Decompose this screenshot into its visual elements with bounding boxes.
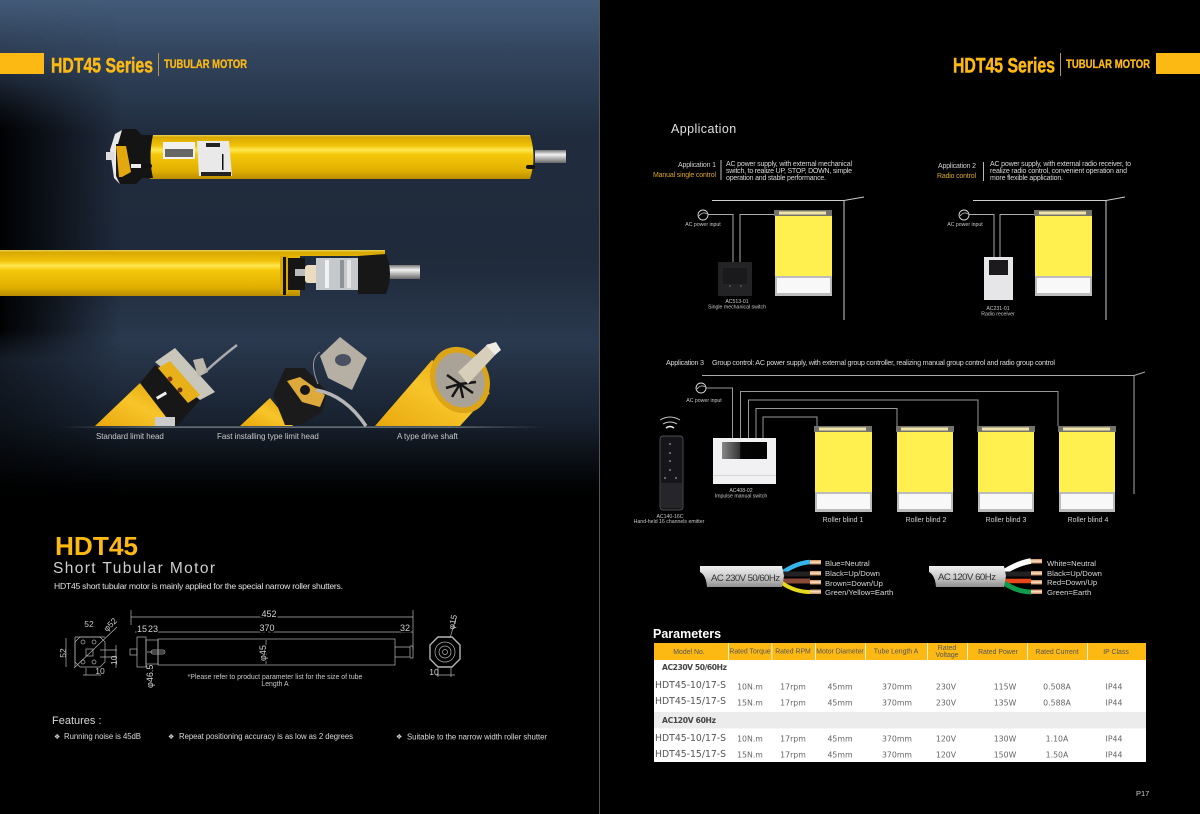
table values: 130W	[994, 734, 1017, 744]
right header	[953, 53, 1200, 78]
table values: 17rpm	[780, 682, 806, 692]
icon: group switch	[713, 438, 776, 484]
drawing: side view: φ46.5	[145, 665, 155, 688]
product title: HDT45	[55, 531, 138, 561]
application 1 text: Application 1	[678, 162, 716, 169]
table values: 17rpm	[780, 698, 806, 708]
section heading: application: Application	[671, 122, 737, 136]
table values: 115W	[994, 682, 1017, 692]
drawing: end view left	[58, 616, 119, 676]
icon: roller blind 3	[977, 426, 1035, 512]
drawing: end view left: 52	[58, 648, 68, 658]
drawing: end view left: φ52	[101, 616, 119, 633]
icon: roller blind 4	[1058, 426, 1116, 512]
cable: AC 230V: Blue=Neutral	[825, 559, 870, 568]
blind labels: Roller blind 3	[986, 517, 1027, 524]
heading: parameters: Parameters	[653, 627, 721, 641]
icon: A type drive shaft	[375, 337, 501, 426]
photo captions: A type drive shaft	[397, 432, 459, 441]
application 1 text: operation and stable performance.	[726, 175, 826, 182]
application 2 diagram: AC power input	[947, 222, 983, 228]
table header: Voltage	[936, 652, 959, 659]
application 3 diagram	[634, 372, 1145, 525]
table values: 0.508A	[1043, 682, 1071, 692]
table model names: HDT45-10/17-S	[655, 733, 726, 744]
table header: Rated Current	[1035, 649, 1079, 656]
table values: 230V	[936, 682, 957, 692]
right header: HDT45 Series	[953, 54, 1055, 78]
motor: complete tubular motor	[106, 129, 566, 184]
application 1 diagram: AC513-01	[725, 299, 749, 305]
application 2 text: more flexible application.	[990, 175, 1063, 182]
icon: standard limit head	[95, 345, 237, 426]
application 1 text	[653, 160, 852, 182]
drawing: end view right	[429, 613, 460, 677]
application 3 text: Application 3	[666, 358, 704, 367]
detail photos row	[60, 337, 545, 441]
features: ❖	[396, 734, 402, 741]
cable: AC 230V	[700, 559, 893, 597]
application 2 text: realize radio control, convenient operation and	[990, 168, 1127, 175]
table values: 135W	[994, 698, 1017, 708]
table values: 15N.m	[737, 698, 763, 708]
table header	[673, 645, 1129, 659]
dimension drawing	[58, 609, 460, 688]
table values: 45mm	[827, 750, 853, 760]
table header: Motor Diameter	[816, 648, 864, 656]
application 3 diagram: AC140-16C	[656, 514, 684, 520]
table values: 10N.m	[737, 682, 763, 692]
table values: IP44	[1106, 698, 1122, 708]
table values	[737, 682, 1122, 760]
photo captions	[96, 432, 459, 441]
blind labels: Roller blind 1	[823, 517, 864, 524]
icon: roller blind 1	[814, 426, 872, 512]
table section labels	[662, 663, 728, 725]
table values: IP44	[1106, 750, 1122, 760]
drawing note: *Please refer to product parameter list for the size of tube	[188, 674, 362, 681]
table values: 15N.m	[737, 750, 763, 760]
page number: P17	[1136, 789, 1149, 798]
application 1 text: Manual single control	[653, 172, 716, 179]
cable: AC 230V: Green/Yellow=Earth	[825, 588, 893, 597]
table values: 17rpm	[780, 750, 806, 760]
features: Running noise is 45dB	[64, 732, 141, 741]
drawing: end view right: φ15	[446, 613, 459, 630]
drawing: side view: 15	[137, 624, 147, 634]
table column dividers	[728, 643, 1088, 660]
table values: 45mm	[827, 682, 853, 692]
cable: AC 230V: Black=Up/Down	[825, 569, 880, 578]
drawing: side view: 370	[259, 623, 275, 633]
table values: 120V	[936, 734, 957, 744]
motor: cutaway view	[0, 250, 420, 296]
left header: HDT45 Series	[51, 54, 153, 78]
application 1 diagram	[685, 197, 864, 320]
table values: 45mm	[827, 698, 853, 708]
table values: 1.50A	[1046, 750, 1069, 760]
cable: AC 230V: AC 230V 50/60Hz	[711, 573, 780, 584]
cable: AC 120V: Red=Down/Up	[1047, 578, 1097, 587]
blind labels: Roller blind 4	[1068, 517, 1109, 524]
drawing: side view: 32	[400, 623, 410, 633]
table model names: HDT45-10/17-S	[655, 680, 726, 691]
icon: roller blind	[1034, 210, 1092, 296]
application 3 diagram: Impulse manual switch	[715, 494, 767, 500]
left header: TUBULAR MOTOR	[164, 57, 247, 71]
table header: Model No.	[673, 649, 705, 656]
table header: Rated	[938, 645, 956, 652]
features	[52, 715, 547, 742]
application 1 text: AC power supply, with external mechanical	[726, 161, 852, 168]
product title: HDT45 short tubular motor is mainly applied for the special narrow roller shutters.	[54, 581, 343, 591]
table header: Tube Length A	[874, 648, 919, 656]
table section labels: AC230V 50/60Hz	[662, 663, 728, 672]
table values: 1.10A	[1046, 734, 1069, 744]
drawing: end view right: 10	[429, 667, 439, 677]
table values: 370mm	[882, 698, 912, 708]
table values: 370mm	[882, 682, 912, 692]
table header: Rated Power	[978, 649, 1019, 656]
table section labels: AC120V 60Hz	[662, 716, 717, 725]
icon: roller blind	[774, 210, 832, 296]
table values: IP44	[1106, 734, 1122, 744]
application 1 diagram: Single mechanical switch	[708, 304, 766, 310]
application 3 diagram: Hand-held 16 channels emitter	[634, 519, 705, 525]
icon: roller blind 2	[896, 426, 954, 512]
table values: 45mm	[827, 734, 853, 744]
application 1 text: switch, to realize UP, STOP, DOWN, simple	[726, 168, 852, 175]
table values: 0.588A	[1043, 698, 1071, 708]
drawing: side view: 452	[261, 609, 277, 619]
application 2 diagram: Radio receiver	[981, 312, 1015, 318]
parameters table	[654, 643, 1146, 762]
icon: fast installing limit head	[240, 337, 367, 426]
cable: AC 120V: Black=Up/Down	[1047, 569, 1102, 578]
features: Features :	[52, 715, 102, 727]
table header: Rated RPM	[775, 648, 811, 656]
table model names	[655, 680, 726, 760]
product title	[53, 531, 343, 591]
application 2 text: Application 2	[938, 163, 976, 170]
right header: TUBULAR MOTOR	[1066, 57, 1150, 71]
drawing: side view: φ45	[258, 645, 268, 661]
cable: AC 120V: AC 120V 60Hz	[938, 572, 996, 583]
table values: IP44	[1106, 682, 1122, 692]
table values: 230V	[936, 698, 957, 708]
application 1 diagram: AC power input	[685, 222, 721, 228]
photo captions: Fast installing type limit head	[217, 432, 319, 441]
application 3 text: Group control: AC power supply, with external group controller, realizing manual group control and radio group control	[712, 358, 1055, 367]
table header: Rated Torque	[729, 648, 771, 656]
table model names: HDT45-15/17-S	[655, 749, 726, 760]
icon: radio receiver	[984, 257, 1013, 300]
table values: 370mm	[882, 734, 912, 744]
drawing: side view	[130, 609, 413, 688]
drawing note: Length A	[261, 681, 289, 688]
product title: Short Tubular Motor	[53, 560, 215, 577]
features: ❖	[54, 734, 60, 741]
table values: 150W	[994, 750, 1017, 760]
cable: AC 230V: Brown=Down/Up	[825, 579, 883, 588]
left header	[0, 53, 247, 78]
table values: 370mm	[882, 750, 912, 760]
drawing note	[188, 674, 362, 688]
panel: right page background	[600, 0, 1200, 814]
floor line	[60, 426, 545, 428]
icon: mechanical switch	[718, 262, 752, 296]
application 3 diagram: AC power input	[686, 398, 722, 404]
table model names: HDT45-15/17-S	[655, 696, 726, 707]
drawing: end view left: 10	[95, 666, 105, 676]
table values: 10N.m	[737, 734, 763, 744]
drawing: end view left: 10	[109, 655, 119, 665]
features: ❖	[168, 734, 174, 741]
features: Repeat positioning accuracy is as low as 2 degrees	[179, 732, 353, 741]
features: Suitable to the narrow width roller shutter	[407, 732, 547, 742]
application 2 text: Radio control	[937, 173, 976, 180]
cable: AC 120V: Green=Earth	[1047, 588, 1091, 597]
panel: left page background	[0, 0, 600, 814]
application 2 text: AC power supply, with external radio receiver, to	[990, 161, 1131, 168]
cable: AC 120V: White=Neutral	[1047, 559, 1096, 568]
application 3 diagram: AC408-02	[729, 488, 753, 494]
drawing: end view left: 52	[84, 619, 94, 629]
table values: 120V	[936, 750, 957, 760]
application 2 text	[937, 161, 1131, 182]
cable: AC 120V	[929, 559, 1102, 597]
photo captions: Standard limit head	[96, 432, 164, 441]
blind labels: Roller blind 2	[906, 517, 947, 524]
application 2 diagram	[947, 197, 1125, 320]
table header: IP Class	[1103, 649, 1129, 656]
blind labels	[823, 517, 1109, 524]
icon: hand-held emitter	[660, 417, 683, 510]
table values: 17rpm	[780, 734, 806, 744]
drawing: side view: 23	[148, 624, 158, 634]
application 2 diagram: AC231-01	[986, 306, 1010, 312]
